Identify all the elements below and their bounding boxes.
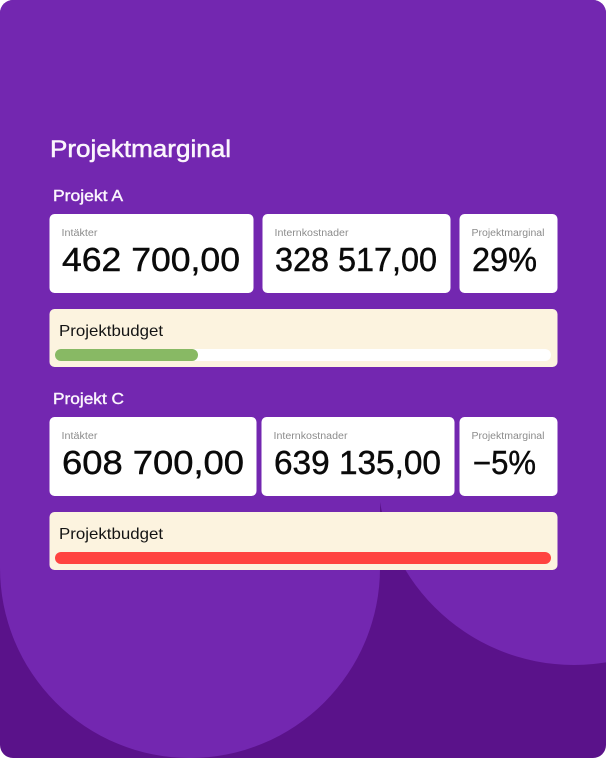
card: Internkostnader A: 328 517,00 (275, 241, 437, 278)
card: Projektmarginal A (460, 214, 558, 293)
card: Projektmarginal A: Projektmarginal (472, 228, 544, 239)
card: Intäkter A: 462 700,00 (62, 241, 240, 278)
card: Internkostnader A (262, 214, 450, 293)
card: Intäkter C: Intäkter (62, 431, 98, 442)
card: Projektmarginal C (460, 417, 558, 496)
section heading: Projekt C: Projekt C (53, 391, 124, 408)
card: Projektmarginal C: Projektmarginal (472, 431, 544, 442)
budget panel C: Projektbudget (59, 526, 164, 543)
title: Projektmarginal (50, 136, 231, 163)
card: Internkostnader C: Internkostnader (274, 431, 348, 442)
card: Intäkter A (50, 214, 254, 293)
section heading: Projekt A: Projekt A (53, 188, 123, 205)
card: Intäkter C: 608 700,00 (62, 444, 244, 481)
card: Intäkter A: Intäkter (62, 228, 98, 239)
card: Internkostnader C (262, 417, 454, 496)
card: Internkostnader C: 639 135,00 (274, 444, 441, 481)
budget panel A: Projektbudget (59, 323, 164, 340)
card: Projektmarginal A: 29% (472, 241, 537, 278)
card: Intäkter C (50, 417, 256, 496)
card: Internkostnader A: Internkostnader (274, 228, 349, 239)
card: Projektmarginal C: −5% (473, 444, 536, 481)
budget panel C (50, 512, 558, 570)
budget panel A (50, 309, 558, 367)
